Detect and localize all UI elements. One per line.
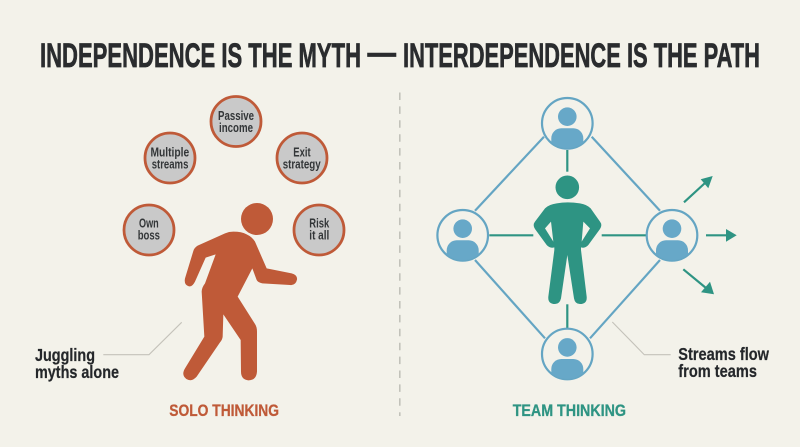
- juggled ball: Multiple streams: streams: [152, 158, 188, 172]
- juggled ball: Passive income: Passive: [218, 109, 254, 123]
- arrow: stream down-right: [683, 269, 714, 294]
- panel: team thinking: [437, 98, 769, 420]
- diagram: blue network connections: [475, 137, 660, 338]
- heading: solo thinking: SOLO THINKING: [169, 401, 279, 420]
- juggled ball: Own boss: Own: [139, 217, 159, 231]
- juggled ball: Risk it all: it all: [309, 229, 329, 243]
- juggled ball: Multiple streams: Multiple: [150, 146, 189, 160]
- juggled ball: Exit strategy: strategy: [283, 158, 321, 172]
- juggled ball: Risk it all: [294, 205, 344, 255]
- juggled ball: Exit strategy: Exit: [293, 146, 311, 160]
- panel: solo thinking: [35, 96, 344, 420]
- title: —: [368, 34, 396, 72]
- juggled ball: Multiple streams: [145, 133, 195, 183]
- node: left teammate: [437, 210, 488, 270]
- title: INDEPENDENCE IS THE MYTH: [40, 37, 361, 75]
- icon: stumbling solo figure: [183, 203, 297, 380]
- diagram: teal links to centre: [489, 150, 646, 328]
- juggled ball: Passive income: [211, 96, 261, 146]
- callout: juggling myths alone: Juggling: [35, 345, 95, 365]
- heading: team thinking: TEAM THINKING: [513, 401, 626, 420]
- node: bottom teammate: [542, 329, 593, 389]
- node: top teammate: [542, 98, 593, 158]
- arrow: stream up-right: [684, 176, 713, 202]
- juggled ball: Risk it all: Risk: [309, 217, 329, 231]
- title: [40, 34, 760, 75]
- arrow: stream right: [706, 229, 737, 242]
- node: right teammate: [647, 210, 697, 270]
- callout: streams flow from teams: Streams flow: [678, 344, 769, 364]
- callout: juggling myths alone: [35, 322, 182, 382]
- juggled ball: Exit strategy: [277, 133, 327, 183]
- juggled ball: Own boss: boss: [138, 229, 160, 243]
- callout: juggling myths alone: myths alone: [35, 362, 119, 382]
- callout: streams flow from teams: [612, 322, 769, 381]
- icon: central team figure: [534, 176, 601, 304]
- callout: streams flow from teams: from teams: [678, 361, 757, 381]
- juggled ball: Own boss: [124, 205, 174, 255]
- juggled ball: Passive income: income: [219, 121, 253, 135]
